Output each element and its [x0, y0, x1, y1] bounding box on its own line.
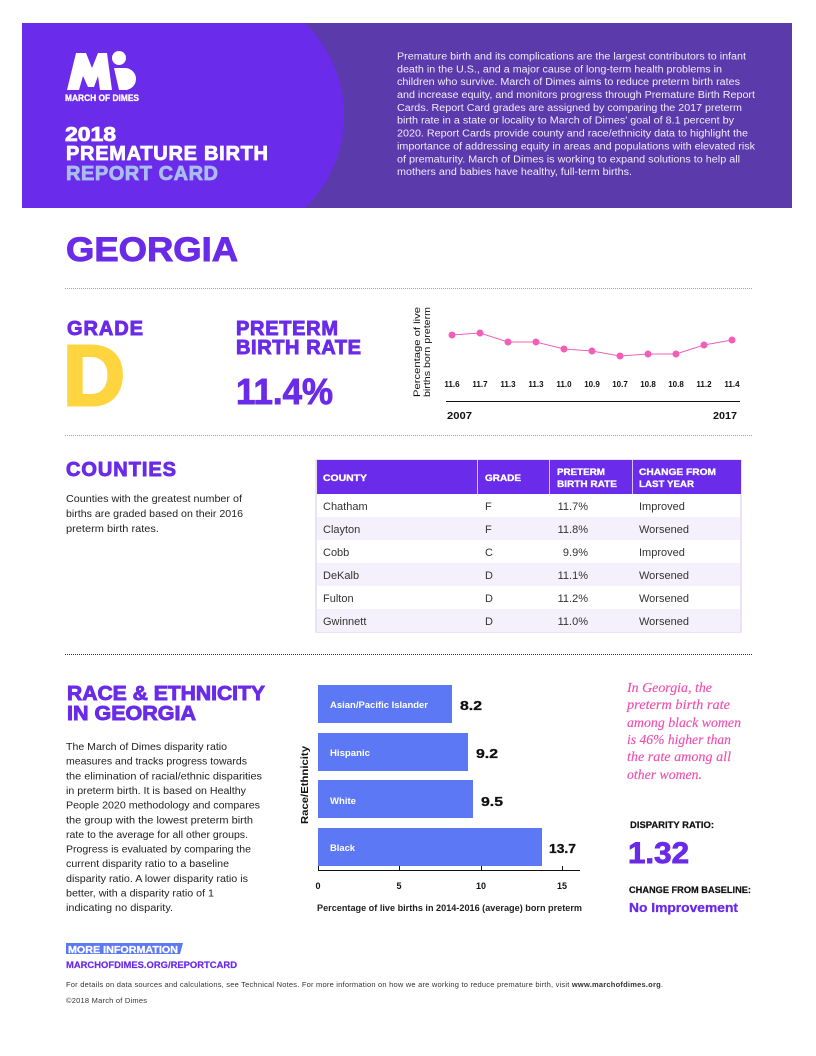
callout: black women rate: In Georgia, the: [626, 681, 712, 696]
chart values: 11.6: [444, 380, 460, 389]
table rows: 11.8%: [558, 524, 588, 536]
panel: preterm birth rate: 11.4%: [236, 371, 333, 412]
table header: COUNTY: [323, 473, 367, 483]
bar chart: preterm rate by race: Asian/Pacific Islander: [330, 700, 429, 710]
header title: [65, 124, 268, 185]
chart axis title: Percentage of live: [412, 307, 422, 397]
panel: disparity ratio: [628, 820, 751, 915]
disparity ratio explanation: the group with the lowest preterm birth: [66, 814, 253, 826]
callout: black women rate: other women.: [627, 768, 702, 783]
logo: March of Dimes: MARCH OF DIMES: [65, 93, 139, 103]
chart values: 11.3: [528, 380, 544, 389]
bar chart: preterm rate by race: [300, 685, 582, 914]
chart values: [444, 380, 740, 389]
table rows: Improved: [639, 501, 685, 513]
table rows: D: [485, 593, 493, 605]
more information tag: MORE INFORMATION: [68, 945, 178, 956]
header title: REPORT CARD: [66, 163, 218, 185]
disparity ratio explanation: in preterm birth. It is based on Healthy: [66, 785, 247, 797]
header intro paragraph: mothers and babies have healthy, full-term births.: [397, 167, 632, 178]
bar chart: preterm rate by race: 8.2: [460, 698, 482, 713]
header intro paragraph: and increase equity, and monitors progress through Premature Birth Report: [397, 90, 755, 101]
callout: black women rate: is 46% higher than: [627, 733, 731, 748]
table rows: F: [485, 524, 492, 536]
panel: counties intro: Counties with the greatest number of: [66, 493, 242, 505]
table header: GRADE: [485, 473, 521, 483]
more information footer: MARCHOFDIMES.ORG/REPORTCARD: [66, 960, 237, 971]
panel: preterm birth rate: PRETERM: [236, 318, 338, 340]
table rows: Worsened: [639, 616, 689, 628]
header intro paragraph: 2020. Report Cards provide county and race/ethnicity data to highlight the: [397, 129, 748, 140]
table rows: 11.0%: [558, 616, 588, 628]
table rows: Worsened: [639, 593, 689, 605]
header intro paragraph: [397, 52, 756, 178]
disparity ratio explanation: indicating no disparity.: [66, 902, 173, 914]
line chart: preterm birth rate 2007-2017: 2017: [713, 411, 737, 422]
table rows: [323, 501, 689, 628]
bar chart: preterm rate by race: Black: [330, 843, 356, 853]
more information footer: For details on data sources and calculations, see Technical Notes. For more information on how we are working to reduce premature birth, visit www.marchofdimes.org.: [66, 980, 663, 989]
disparity ratio explanation: measures and tracks progress towards: [66, 756, 247, 768]
x axis title: Percentage of live births in 2014-2016 (average) born preterm: [317, 903, 582, 914]
disparity ratio explanation: [66, 741, 262, 914]
chart values: 11.7: [472, 380, 488, 389]
table rows: Chatham: [323, 501, 368, 513]
panel: counties intro: births are graded based on their 2016: [66, 508, 243, 520]
callout: black women rate: among black women: [627, 716, 741, 731]
panel: preterm birth rate: BIRTH RATE: [236, 337, 361, 359]
table rows: Cobb: [323, 547, 349, 559]
table rows: DeKalb: [323, 570, 359, 582]
table rows: 11.2%: [558, 593, 588, 605]
table rows: Worsened: [639, 570, 689, 582]
chart values: 10.9: [584, 380, 600, 389]
header intro paragraph: of prematurity. March of Dimes is working to expand solutions to help all: [397, 154, 740, 165]
table: counties: [316, 460, 741, 632]
panel: race and ethnicity text: [66, 683, 266, 914]
header intro paragraph: Cards. Report Card grades are assigned by comparing the 2017 preterm: [397, 103, 742, 114]
more information footer: ©2018 March of Dimes: [66, 996, 147, 1005]
chart values: 10.7: [612, 380, 628, 389]
disparity ratio explanation: People 2020 methodology and compares: [66, 800, 260, 812]
table rows: F: [485, 501, 492, 513]
disparity ratio explanation: the elimination of racial/ethnic disparities: [66, 770, 262, 782]
table rows: Improved: [639, 547, 685, 559]
table rows: D: [485, 570, 493, 582]
panel: race and ethnicity text: IN GEORGIA: [67, 703, 196, 725]
chart values: 10.8: [668, 380, 684, 389]
state heading: GEORGIA: [66, 231, 238, 269]
table rows: Fulton: [323, 593, 354, 605]
line chart: preterm birth rate 2007-2017: [412, 307, 740, 422]
table rows: D: [485, 616, 493, 628]
header intro paragraph: Premature birth and its complications are the largest contributors to infant: [397, 52, 746, 62]
chart values: 11.4: [724, 380, 740, 389]
chart axis title: births born preterm: [422, 307, 432, 397]
panel: counties intro: preterm birth rates.: [66, 523, 159, 535]
chart values: 11.0: [556, 380, 572, 389]
table header: BIRTH RATE: [557, 479, 617, 489]
chart values: 11.2: [696, 380, 712, 389]
bar chart: preterm rate by race: 10: [476, 881, 486, 891]
bar chart: preterm rate by race: White: [330, 796, 356, 806]
chart values: 11.3: [500, 380, 516, 389]
disparity ratio explanation: Progress is evaluated by comparing the: [66, 844, 251, 856]
header title: PREMATURE BIRTH: [66, 143, 268, 165]
line chart: preterm birth rate 2007-2017: 2007: [447, 411, 472, 422]
disparity ratio explanation: The March of Dimes disparity ratio: [66, 741, 227, 753]
header intro paragraph: birth rate in a state or locality to March of Dimes' goal of 8.1 percent by: [397, 116, 734, 127]
table rows: Worsened: [639, 524, 689, 536]
header intro paragraph: death in the U.S., and a major cause of long-term health problems in: [397, 64, 722, 75]
bar chart: preterm rate by race: 5: [396, 881, 402, 891]
panel: preterm birth rate: [236, 318, 361, 412]
bar chart: preterm rate by race: 9.5: [481, 794, 503, 809]
callout: black women rate: the rate among all: [627, 750, 731, 765]
header banner: [22, 23, 792, 208]
table header: CHANGE FROM: [639, 467, 716, 477]
table rows: 9.9%: [563, 547, 588, 559]
y axis title: Race/Ethnicity: [300, 746, 311, 824]
table rows: 11.7%: [558, 501, 588, 513]
header intro paragraph: children who survive. March of Dimes aims to reduce preterm birth rates: [397, 77, 740, 88]
bar chart: preterm rate by race: 9.2: [476, 746, 498, 761]
header title: 2018: [65, 124, 116, 146]
panel: grade: [63, 318, 143, 424]
header intro paragraph: importance of addressing equity in areas and populations with elevated risk: [397, 141, 756, 152]
logo: March of Dimes: [65, 51, 139, 103]
table rows: Gwinnett: [323, 616, 366, 628]
disparity ratio explanation: disparity ratio. A lower disparity ratio is: [66, 873, 248, 885]
table header: [323, 467, 716, 489]
chart values: 10.8: [640, 380, 656, 389]
more information footer: [66, 943, 663, 1005]
disparity ratio explanation: better, with a disparity ratio of 1: [66, 888, 214, 900]
panel: counties intro: [66, 459, 243, 535]
table rows: C: [485, 547, 493, 559]
panel: disparity ratio: DISPARITY RATIO:: [630, 820, 714, 830]
panel: grade: D: [63, 329, 125, 424]
bar chart: preterm rate by race: 15: [557, 881, 567, 891]
bar chart: preterm rate by race: Hispanic: [330, 748, 370, 758]
table rows: Clayton: [323, 524, 360, 536]
chart axis title: [412, 307, 432, 397]
bar chart: preterm rate by race: 13.7: [549, 841, 576, 856]
table header: LAST YEAR: [639, 479, 695, 489]
panel: disparity ratio: CHANGE FROM BASELINE:: [629, 885, 751, 895]
bar chart: preterm rate by race: 0: [315, 881, 321, 891]
callout: black women rate: preterm birth rate: [626, 698, 730, 713]
disparity ratio explanation: current disparity ratio to a baseline: [66, 858, 229, 870]
panel: counties intro: COUNTIES: [66, 459, 176, 481]
panel: race and ethnicity text: RACE & ETHNICITY: [67, 683, 266, 705]
table rows: 11.1%: [558, 570, 588, 582]
callout: black women rate: [626, 681, 741, 783]
disparity ratio explanation: rate to the average for all other groups.: [66, 829, 248, 841]
panel: grade: GRADE: [67, 318, 143, 340]
table header: PRETERM: [557, 467, 605, 477]
panel: disparity ratio: No Improvement: [629, 900, 739, 915]
panel: disparity ratio: 1.32: [628, 837, 689, 870]
